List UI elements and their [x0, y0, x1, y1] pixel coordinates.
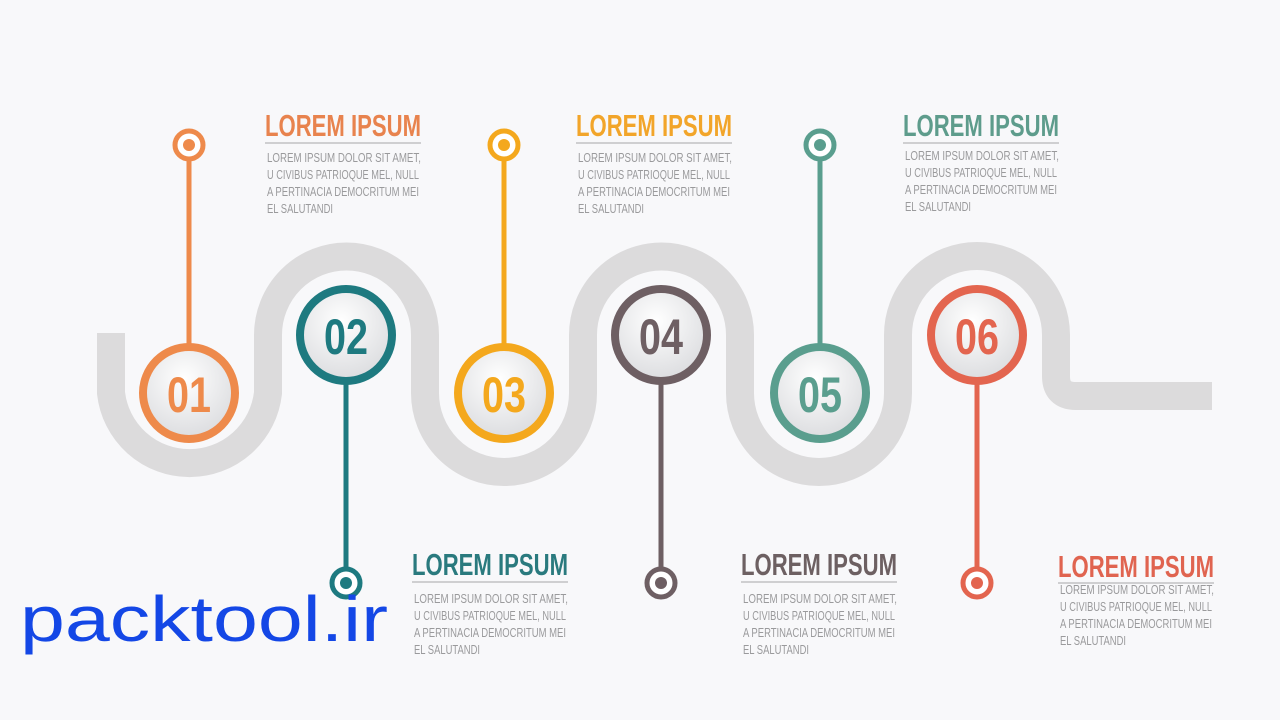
- step 02: [300, 289, 392, 597]
- text block 1: A PERTINACIA DEMOCRITUM MEI: [267, 185, 419, 199]
- text block 1: [265, 108, 421, 216]
- text block 6: EL SALUTANDI: [1060, 634, 1126, 648]
- text block 4: EL SALUTANDI: [743, 643, 809, 657]
- text block 3: [576, 108, 732, 216]
- text block 1: EL SALUTANDI: [267, 202, 333, 216]
- text block 3: A PERTINACIA DEMOCRITUM MEI: [578, 185, 730, 199]
- text block 4: LOREM IPSUM DOLOR SIT AMET,: [743, 592, 897, 606]
- text block 6: U CIVIBUS PATRIOQUE MEL, NULL: [1060, 600, 1212, 614]
- text block 4: [741, 547, 897, 657]
- text block 4: A PERTINACIA DEMOCRITUM MEI: [743, 626, 895, 640]
- text block 6: [1058, 549, 1214, 648]
- text block 5: EL SALUTANDI: [905, 200, 971, 214]
- text block 2: U CIVIBUS PATRIOQUE MEL, NULL: [414, 609, 566, 623]
- text block 6: LOREM IPSUM: [1058, 549, 1214, 584]
- text block 2: EL SALUTANDI: [414, 643, 480, 657]
- text block 5: U CIVIBUS PATRIOQUE MEL, NULL: [905, 166, 1057, 180]
- text block 5: LOREM IPSUM DOLOR SIT AMET,: [905, 149, 1059, 163]
- road path: [111, 256, 1212, 472]
- text block 2: A PERTINACIA DEMOCRITUM MEI: [414, 626, 566, 640]
- text block 4: U CIVIBUS PATRIOQUE MEL, NULL: [743, 609, 895, 623]
- text block 3: EL SALUTANDI: [578, 202, 644, 216]
- text block 6: LOREM IPSUM DOLOR SIT AMET,: [1060, 583, 1214, 597]
- step 03: 03: [482, 367, 526, 423]
- text block 3: LOREM IPSUM: [576, 108, 732, 143]
- step 05: 05: [798, 367, 842, 423]
- text block 1: LOREM IPSUM: [265, 108, 421, 143]
- text block 3: LOREM IPSUM DOLOR SIT AMET,: [578, 151, 732, 165]
- text block 2: LOREM IPSUM DOLOR SIT AMET,: [414, 592, 568, 606]
- text block 2: [412, 547, 568, 657]
- watermark: packtool.ir: [20, 583, 388, 655]
- step 02: 02: [324, 309, 368, 365]
- text block 6: A PERTINACIA DEMOCRITUM MEI: [1060, 617, 1212, 631]
- text block 2: LOREM IPSUM: [412, 547, 568, 582]
- step 01: [143, 131, 235, 439]
- step 06: [931, 289, 1023, 597]
- text block 5: A PERTINACIA DEMOCRITUM MEI: [905, 183, 1057, 197]
- step 04: 04: [639, 309, 683, 365]
- text block 1: LOREM IPSUM DOLOR SIT AMET,: [267, 151, 421, 165]
- text block 1: U CIVIBUS PATRIOQUE MEL, NULL: [267, 168, 419, 182]
- text block 4: LOREM IPSUM: [741, 547, 897, 582]
- step 01: 01: [167, 367, 211, 423]
- step 04: [615, 289, 707, 597]
- text block 3: U CIVIBUS PATRIOQUE MEL, NULL: [578, 168, 730, 182]
- text block 5: [903, 108, 1059, 214]
- step 03: [458, 131, 550, 439]
- step 05: [774, 131, 866, 439]
- step 06: 06: [955, 309, 999, 365]
- text block 5: LOREM IPSUM: [903, 108, 1059, 143]
